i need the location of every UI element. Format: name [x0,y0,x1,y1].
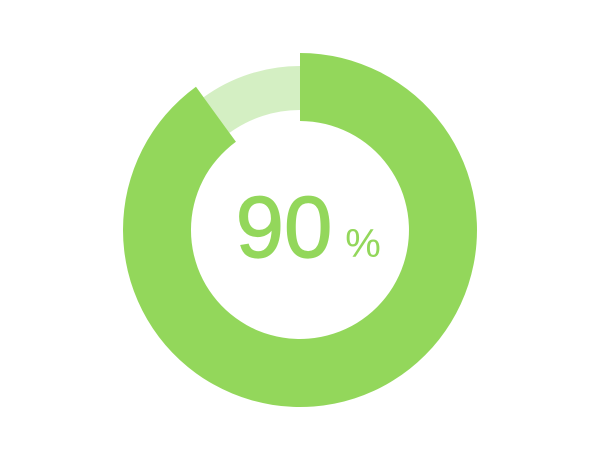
value label: % [345,222,381,266]
value label [236,179,381,276]
remaining segment (light) [216,88,300,115]
90% arc [123,53,477,407]
value label: 90 [236,179,332,276]
